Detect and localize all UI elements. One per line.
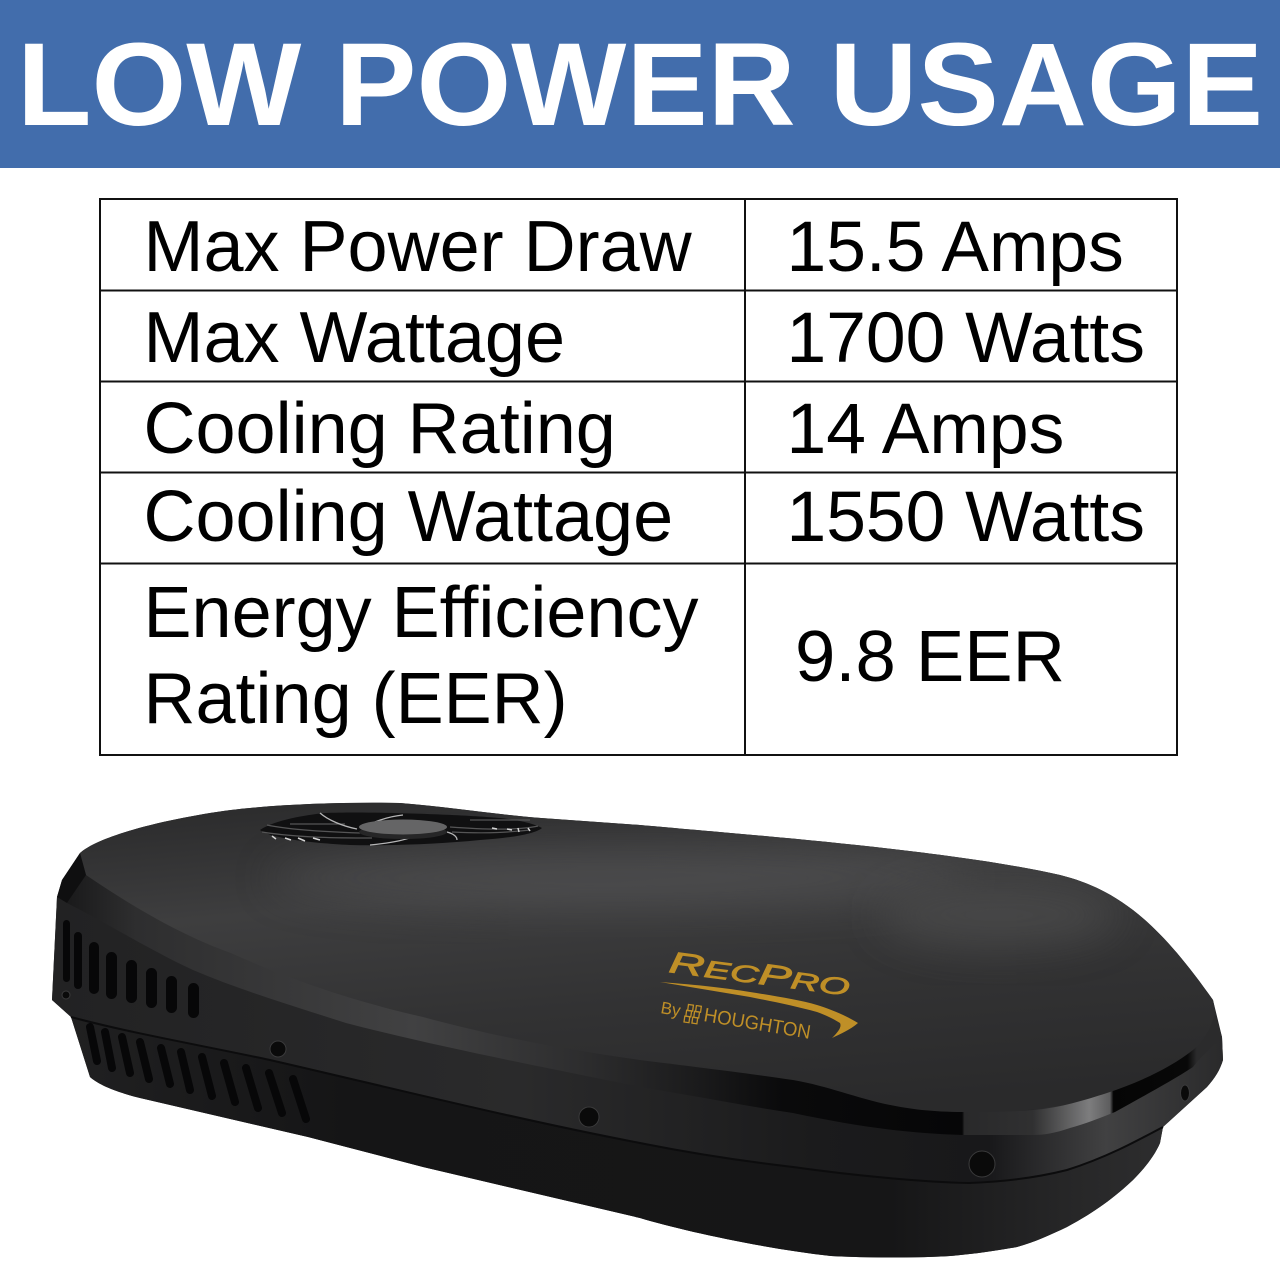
logo houghton name: HOUGHTON <box>702 1004 812 1044</box>
logo wordmark: R EC P RO <box>667 946 852 1003</box>
RecPro logo <box>659 946 858 1044</box>
row: cooling wattage <box>144 477 1145 557</box>
base silhouette <box>52 803 1223 1258</box>
row: max power draw: Max Power Draw <box>144 207 693 287</box>
lower tub <box>71 1017 1163 1258</box>
specification table <box>100 199 1177 755</box>
logo byline: By <box>659 998 683 1020</box>
row: energy efficiency rating: Energy Efficiency <box>144 573 698 653</box>
side panel <box>52 897 1223 1183</box>
row: cooling rating <box>144 389 1064 469</box>
row: max power draw: 15.5 Amps <box>786 207 1124 287</box>
logo swoosh <box>660 982 858 1038</box>
shell highlight <box>270 848 1120 947</box>
top shell <box>80 803 1218 1118</box>
row: cooling wattage: 1550 Watts <box>786 477 1145 557</box>
row: max wattage: Max Wattage <box>144 298 565 378</box>
logo houghton emblem <box>684 1004 701 1024</box>
product: rooftop air conditioner <box>52 803 1223 1258</box>
row: cooling wattage: Cooling Wattage <box>144 477 673 557</box>
left corner cap <box>57 853 86 903</box>
lower vent slots <box>90 1027 306 1119</box>
row: max wattage: 1700 Watts <box>786 298 1145 378</box>
row: max power draw <box>144 207 1124 287</box>
screws <box>62 991 1190 1177</box>
title banner: LOW POWER USAGE <box>17 19 1263 151</box>
row: energy efficiency rating <box>144 573 1065 739</box>
seam line <box>71 1017 1163 1183</box>
row: cooling rating: Cooling Rating <box>144 389 616 469</box>
row: energy efficiency rating: 9.8 EER <box>795 616 1065 697</box>
upper vent slots <box>63 920 199 1018</box>
row: energy efficiency rating: Rating (EER) <box>144 659 568 739</box>
row: cooling rating: 14 Amps <box>786 389 1064 469</box>
fan grille <box>260 812 542 845</box>
glossy trim strip <box>67 875 1222 1135</box>
row: max wattage <box>144 298 1145 378</box>
